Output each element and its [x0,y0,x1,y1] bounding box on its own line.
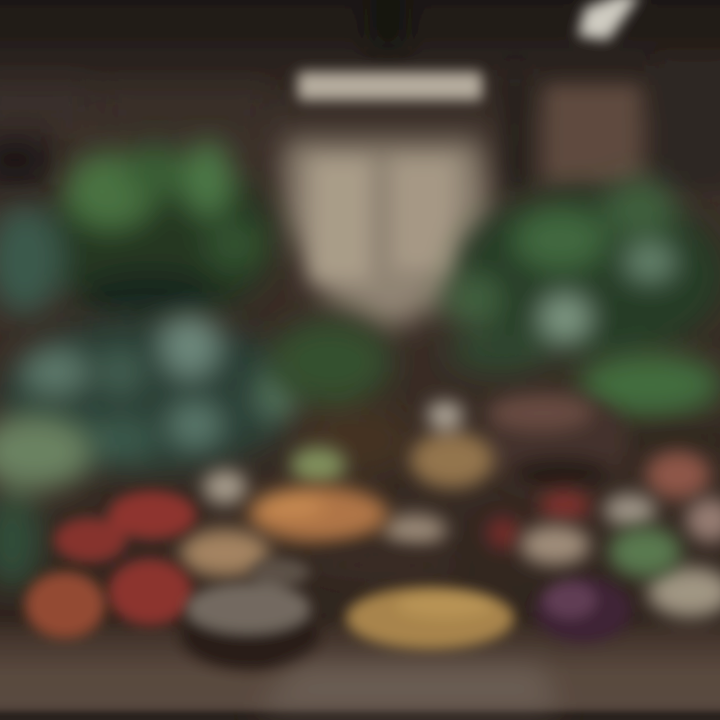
centre wall panel [285,140,490,330]
table top [0,625,720,720]
food: orange carrots on plate [248,486,388,542]
foliage: lower right bright green [578,353,720,417]
food: garlic and pale items [203,470,447,546]
food: peach centre item [180,529,270,577]
food: orange tomato [25,572,105,638]
food: assorted pale items right [520,494,720,617]
food: green herbs right [609,527,681,577]
foliage: far left light green [0,414,93,588]
plate shadow [310,549,460,581]
table lower edge [0,711,720,720]
hanging lamp stem [370,0,406,50]
food: yellow spice mound [346,587,514,649]
foliage: lower left blue-green leaves [0,313,300,473]
food: golden bowl centre [410,402,494,488]
food: meat on right [483,392,627,492]
food: lime green item [290,447,346,483]
foliage: upper left [0,140,275,325]
food: dark bowl of grains [180,558,320,670]
right wall panel [500,60,720,190]
centre panel glow [312,160,454,280]
ceiling light bar [298,72,482,100]
dark gap under right foliage [620,428,720,452]
foliage: upper right [442,178,720,374]
ceiling spot light [578,0,640,40]
table highlight [255,665,560,712]
food: red peppers right [487,451,710,549]
food: purple onion [535,577,631,643]
left shelf shadow [0,85,270,185]
foliage: centre left [270,320,410,472]
food: red tomatoes [54,491,196,625]
